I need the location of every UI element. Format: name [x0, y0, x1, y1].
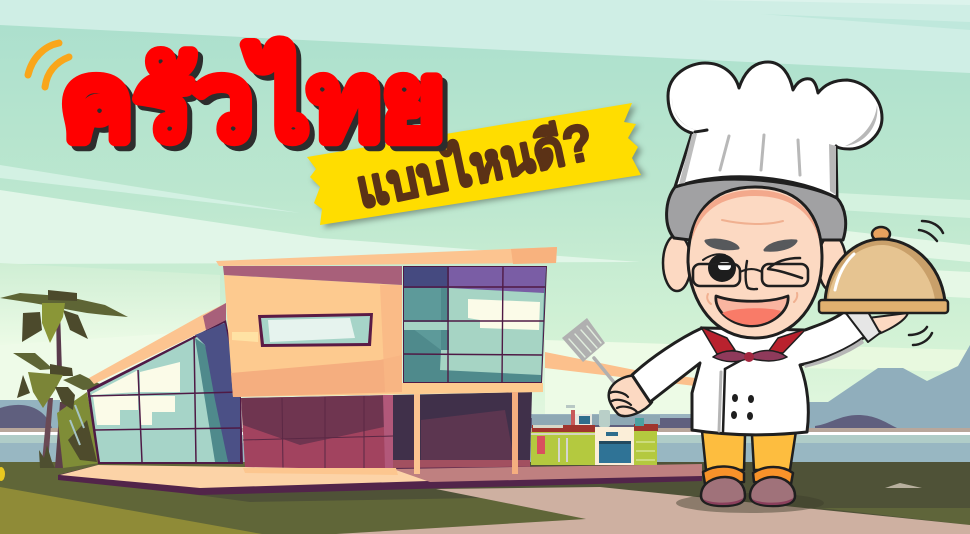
palm trees [0, 290, 128, 468]
gray hair [667, 179, 846, 240]
spatula [562, 318, 617, 386]
eyebrows [706, 240, 738, 249]
small strip window [258, 313, 373, 347]
nose [746, 261, 757, 289]
distant mountains [0, 345, 970, 432]
title: yellow tape banner [307, 103, 646, 228]
shoe shadow [676, 493, 824, 513]
jacket [632, 312, 880, 435]
red collar and bow [701, 327, 806, 362]
ears [663, 235, 846, 291]
ground [0, 462, 970, 534]
right hand [868, 313, 908, 336]
jacket buttons [731, 394, 754, 420]
face [688, 187, 822, 338]
winking eye [768, 258, 802, 278]
open eye [708, 254, 736, 282]
outdoor kitchen [531, 405, 660, 465]
chef hat [668, 62, 882, 198]
sleeve cuff [845, 305, 880, 342]
upper right window [403, 266, 547, 383]
glasses [693, 264, 740, 286]
water [0, 428, 970, 463]
left glass wall [87, 320, 243, 464]
tape text: แบบไหนดี? [351, 111, 598, 220]
platform [58, 465, 702, 495]
title: main red heading: ครัวไทย [65, 45, 450, 167]
mouth [716, 296, 788, 326]
ground floor wall [241, 395, 393, 468]
left wing roof [89, 303, 226, 384]
signal arcs icon [28, 43, 69, 87]
modern house [58, 247, 702, 495]
title: main red heading: ครัวไทย [60, 40, 445, 162]
orange stripe behind chef [545, 352, 695, 386]
motion lines [909, 221, 943, 345]
chef character [562, 62, 948, 506]
carport shadow area [393, 392, 532, 462]
pillars [414, 394, 420, 474]
roof slab [216, 247, 557, 266]
left hand [609, 376, 652, 416]
serving cloche [819, 227, 948, 313]
shoes [701, 477, 795, 506]
upper volume [224, 275, 543, 397]
trousers [702, 431, 796, 484]
